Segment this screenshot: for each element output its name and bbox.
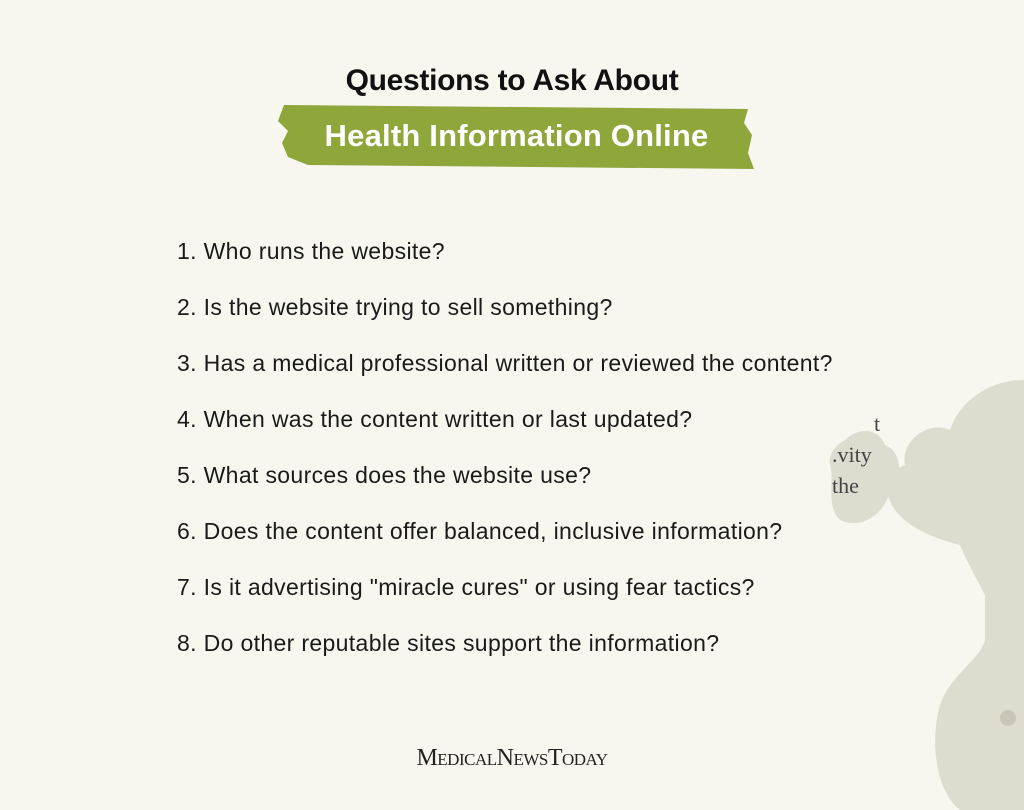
question list: 4. When was the content written or last updated? [177, 406, 692, 432]
question list: 1. Who runs the website? [177, 238, 445, 264]
title: Questions to Ask About [346, 64, 678, 97]
question list: 6. Does the content offer balanced, inclusive information? [177, 518, 782, 544]
decoration: faded book text: .vity [832, 442, 872, 467]
question list: 7. Is it advertising "miracle cures" or using fear tactics? [177, 574, 755, 600]
question list: 5. What sources does the website use? [177, 462, 591, 488]
question list: 3. Has a medical professional written or reviewed the content? [177, 350, 833, 376]
logo: MedicalNewsToday [416, 745, 608, 771]
question list: 2. Is the website trying to sell something? [177, 294, 613, 320]
title banner: green tape: Health Information Online [325, 118, 708, 153]
decoration: faded book text: the [832, 473, 859, 498]
decoration: faded book text [832, 411, 880, 498]
title banner: green tape [278, 105, 754, 169]
question list: 8. Do other reputable sites support the information? [177, 630, 719, 656]
decoration: faded book text: t [874, 411, 880, 436]
